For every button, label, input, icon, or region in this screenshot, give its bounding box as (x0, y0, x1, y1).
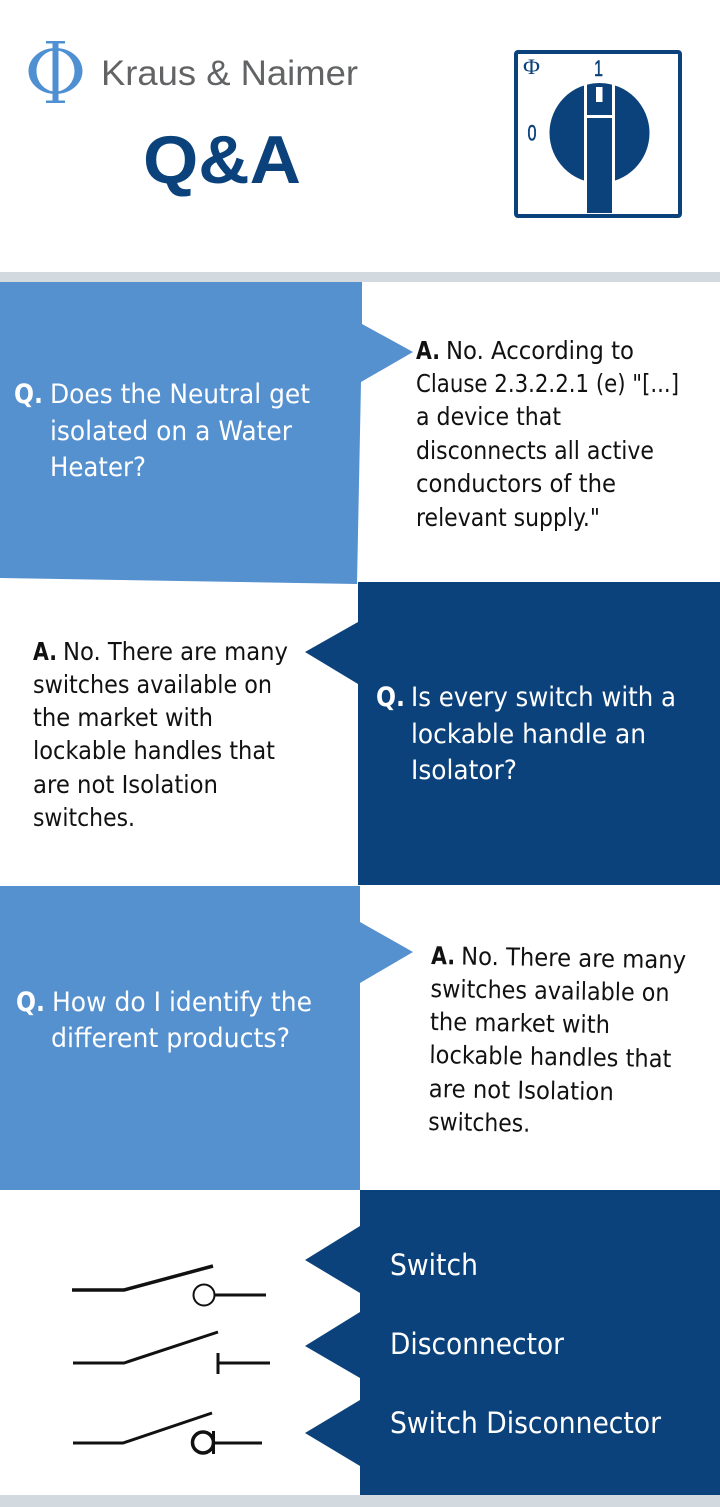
label: Switch Disconnector: Switch Disconnector (390, 1406, 661, 1440)
answer 3 text: are not Isolation (429, 1074, 614, 1106)
icon: rotary switch: Φ (523, 54, 540, 79)
answer 1 text: disconnects all active (416, 436, 654, 465)
label: Switch: Switch (390, 1248, 478, 1282)
icon: switch symbol (72, 1266, 266, 1306)
answer 2 text: A. (33, 637, 57, 666)
label: Disconnector: Disconnector (390, 1327, 564, 1361)
answer 3 text: A. (431, 941, 455, 970)
icon: switch disconnector symbol (73, 1413, 262, 1454)
title: Q&A (143, 122, 301, 198)
panel: question 1 (0, 282, 413, 584)
answer 1 text: No. According to (446, 336, 634, 365)
answer 2 text: the market with (33, 703, 213, 732)
panel: question 2 (305, 582, 720, 885)
answer 2 text (33, 637, 288, 832)
answer 2 text: switches available on (33, 670, 272, 699)
icon: disconnector symbol (73, 1332, 270, 1374)
question 3 text: different products? (51, 1023, 290, 1054)
question 1 text: Q. (14, 379, 43, 410)
answer 3 text: switches. (428, 1107, 530, 1138)
question 2 text: lockable handle an (411, 719, 646, 750)
answer 3 text: switches available on (430, 974, 670, 1007)
icon: rotary switch (516, 52, 680, 216)
answer 2 text: No. There are many (63, 637, 288, 666)
question 3 text (16, 987, 312, 1054)
question 1 text: Does the Neutral get (50, 379, 310, 410)
answer 3 text: No. There are many (461, 942, 686, 974)
question 2 text (376, 682, 676, 786)
answer 1 text: relevant supply." (416, 503, 600, 532)
question 3 text: How do I identify the (52, 987, 312, 1018)
panel: symbol legend (305, 1190, 720, 1495)
icon: rotary switch: 0 (528, 120, 536, 146)
question 1 text: isolated on a Water (50, 416, 293, 447)
icon: phi symbol (28, 41, 82, 103)
question 2 text: Isolator? (411, 755, 517, 786)
panel: question 3 (0, 886, 413, 1190)
logo: Kraus & Naimer (28, 41, 358, 103)
answer 1 text: Clause 2.3.2.2.1 (e) "[...] (416, 369, 679, 398)
answer 3 text (428, 941, 686, 1140)
question 1 text (14, 379, 310, 483)
answer 3 text: the market with (430, 1007, 610, 1039)
question 2 text: Q. (376, 682, 405, 713)
question 3 text: Q. (16, 987, 45, 1018)
top divider band (0, 272, 720, 282)
icon: rotary switch: 1 (594, 56, 603, 81)
answer 1 text: conductors of the (416, 469, 616, 498)
answer 2 text: are not Isolation (33, 770, 218, 799)
answer 1 text (416, 336, 679, 532)
logo wordmark: Kraus & Naimer (101, 54, 358, 93)
question 2 text: Is every switch with a (411, 682, 676, 713)
bottom divider band (0, 1495, 720, 1507)
answer 1 text: a device that (416, 402, 561, 431)
answer 1 text: A. (416, 336, 440, 365)
answer 3 text: lockable handles that (429, 1040, 672, 1073)
question 1 text: Heater? (50, 452, 146, 483)
answer 2 text: switches. (33, 803, 135, 832)
answer 2 text: lockable handles that (33, 736, 275, 765)
